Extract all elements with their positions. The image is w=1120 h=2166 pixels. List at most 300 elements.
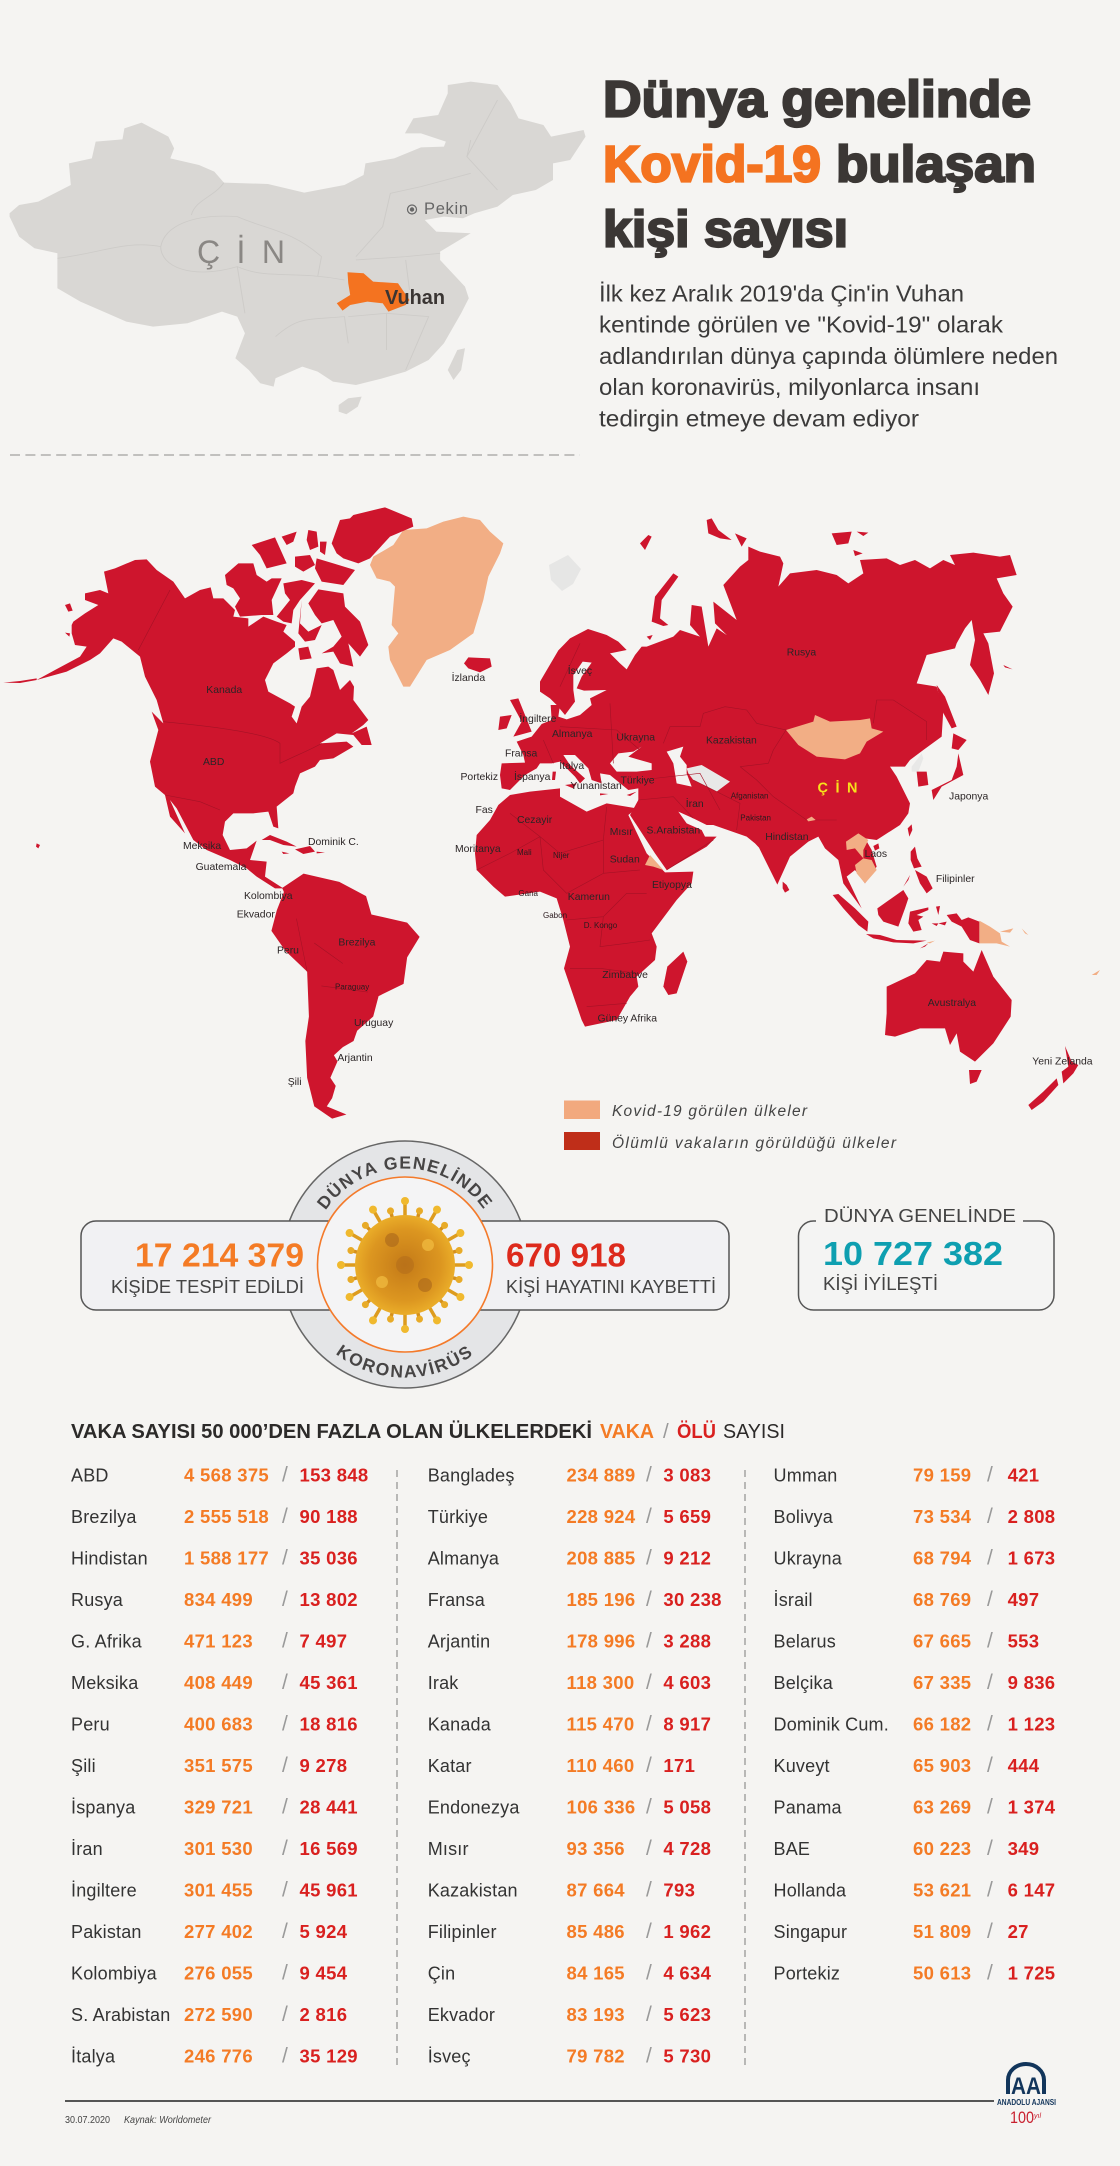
table heading: ÖLÜ bbox=[677, 1420, 716, 1443]
logo: Anadolu Ajansı: AA bbox=[1011, 2073, 1041, 2100]
North Korea bbox=[912, 753, 923, 772]
row: Peru: 400 683 bbox=[184, 1714, 253, 1735]
country labels: Fas bbox=[476, 805, 493, 816]
row: S. Arabistan: S. Arabistan bbox=[71, 2005, 170, 2025]
row: Çin: Çin bbox=[428, 1964, 455, 1984]
row: Singapur: 27 bbox=[1008, 1921, 1029, 1942]
country labels: Uruguay bbox=[354, 1018, 394, 1029]
country labels: İzlanda bbox=[452, 671, 485, 684]
country labels: ABD bbox=[203, 757, 224, 768]
South America bbox=[271, 874, 420, 1119]
logo: Anadolu Ajansı: ANADOLU AJANSI bbox=[997, 2098, 1056, 2107]
country labels: Laos bbox=[865, 849, 887, 860]
row: S. Arabistan bbox=[71, 2003, 347, 2026]
logo: Anadolu Ajansı: 100 bbox=[1010, 2108, 1034, 2127]
intro paragraph: adlandırılan dünya çapında ölümlere neden bbox=[599, 343, 1058, 369]
row: Dominik Cum.: / bbox=[987, 1713, 993, 1736]
row: Kuveyt: 444 bbox=[1008, 1755, 1040, 1776]
row: İngiltere: İngiltere bbox=[71, 1881, 137, 1901]
map legend bbox=[564, 1100, 897, 1152]
row: İspanya: İspanya bbox=[71, 1798, 136, 1818]
row: Belarus bbox=[774, 1630, 1039, 1653]
row: Çin: 84 165 bbox=[566, 1963, 625, 1984]
row: Filipinler: Filipinler bbox=[428, 1922, 497, 1942]
stats box bbox=[81, 1221, 729, 1310]
Mongolia bbox=[786, 715, 883, 759]
row: Mısır: 4 728 bbox=[663, 1838, 711, 1859]
Arctic islands and Caribbean bbox=[3, 507, 492, 854]
row: İsrail: 68 769 bbox=[913, 1589, 971, 1610]
row: Katar: 171 bbox=[663, 1755, 695, 1776]
title: Dünya genelinde bbox=[603, 71, 1031, 128]
row: Umman: 421 bbox=[1008, 1465, 1039, 1486]
row: Hindistan: 1 588 177 bbox=[184, 1548, 269, 1569]
row: Meksika: Meksika bbox=[71, 1673, 139, 1693]
row: İsrail bbox=[774, 1588, 1039, 1611]
row: Peru: Peru bbox=[71, 1715, 110, 1735]
row: ABD: 153 848 bbox=[300, 1465, 368, 1486]
label: Çin: Ç İ N bbox=[197, 234, 285, 270]
row: Irak bbox=[428, 1671, 711, 1694]
country labels: Zimbabve bbox=[602, 970, 648, 981]
row: Kanada: 115 470 bbox=[566, 1714, 634, 1735]
row: Hollanda: / bbox=[987, 1879, 993, 1902]
row: Kolombiya bbox=[71, 1962, 348, 1985]
intro paragraph: kentinde görülen ve "Kovid-19" olarak bbox=[599, 312, 1004, 338]
row: Kazakistan: 793 bbox=[663, 1880, 695, 1901]
country labels: Avustralya bbox=[928, 998, 976, 1009]
country labels: D. Kongo bbox=[584, 921, 618, 930]
table column 3 bbox=[774, 1464, 1056, 1985]
table column 2 bbox=[428, 1464, 722, 2068]
row: İsveç bbox=[428, 2045, 711, 2068]
row: İtalya bbox=[71, 2045, 358, 2068]
table heading: VAKA SAYISI 50 000’DEN FAZLA OLAN ÜLKELERDEKİ bbox=[71, 1420, 592, 1443]
stat: cases: 17 214 379 bbox=[135, 1237, 304, 1274]
Africa bbox=[475, 788, 693, 1027]
Europe, Asia and Africa bbox=[475, 547, 1017, 1027]
row: Fransa: 30 238 bbox=[663, 1589, 722, 1610]
row: İspanya: 28 441 bbox=[300, 1797, 358, 1818]
country labels: İtalya bbox=[559, 759, 584, 772]
row: Katar: Katar bbox=[428, 1756, 472, 1776]
row: Kazakistan: 87 664 bbox=[566, 1880, 625, 1901]
row: ABD bbox=[71, 1464, 368, 1487]
row: G. Afrika bbox=[71, 1630, 347, 1653]
row: Kazakistan: Kazakistan bbox=[428, 1881, 518, 1901]
row: Katar: 110 460 bbox=[566, 1755, 634, 1776]
row: Çin: / bbox=[646, 1962, 652, 1985]
row: Çin: 4 634 bbox=[663, 1963, 712, 1984]
row: Pakistan: Pakistan bbox=[71, 1922, 142, 1942]
intro paragraph bbox=[599, 281, 1058, 432]
row: Umman: 79 159 bbox=[913, 1465, 971, 1486]
row: Endonezya: 106 336 bbox=[566, 1797, 635, 1818]
row: BAE: BAE bbox=[774, 1839, 810, 1859]
row: Peru: / bbox=[282, 1713, 288, 1736]
row: Kuveyt: 65 903 bbox=[913, 1755, 971, 1776]
Hubei province bbox=[337, 272, 409, 312]
country labels: Sudan bbox=[610, 854, 640, 866]
row: İsveç: 5 730 bbox=[663, 2046, 711, 2067]
country labels: Cezayir bbox=[517, 815, 553, 826]
row: BAE: / bbox=[987, 1837, 993, 1860]
row: İspanya bbox=[71, 1796, 358, 1819]
row: İran: 301 530 bbox=[184, 1838, 253, 1859]
row: Rusya: / bbox=[282, 1588, 288, 1611]
ring text bottom: KORONAVİRÜS bbox=[336, 1344, 472, 1378]
row: Hollanda: 53 621 bbox=[913, 1880, 971, 1901]
North America, Greenland, Iceland bbox=[3, 507, 503, 888]
row: Belarus: 553 bbox=[1008, 1631, 1039, 1652]
row: Türkiye: 5 659 bbox=[663, 1506, 711, 1527]
stat: deaths bbox=[506, 1237, 716, 1297]
country labels: Moritanya bbox=[455, 844, 501, 855]
stat: deaths: 670 918 bbox=[506, 1237, 626, 1274]
row: İsveç: İsveç bbox=[428, 2047, 471, 2067]
country labels: Kazakistan bbox=[706, 736, 757, 747]
row: Kuveyt bbox=[774, 1754, 1040, 1777]
country labels: İran bbox=[686, 797, 704, 810]
Eurasia bbox=[500, 547, 1017, 908]
country labels: Rusya bbox=[787, 648, 816, 659]
map: China with Wuhan bbox=[10, 82, 586, 414]
Seas bbox=[610, 747, 692, 787]
world map bbox=[3, 507, 1100, 1119]
row: G. Afrika: 7 497 bbox=[300, 1631, 347, 1652]
logo: Anadolu Ajansı: yıl bbox=[1033, 2113, 1041, 2120]
row: İsrail: / bbox=[987, 1588, 993, 1611]
row: Katar: / bbox=[646, 1754, 652, 1777]
row: Irak: / bbox=[646, 1671, 652, 1694]
map legend: Kovid-19 görülen ülkeler bbox=[612, 1103, 808, 1120]
row: İtalya: 246 776 bbox=[184, 2046, 253, 2067]
country labels: Nijer bbox=[553, 851, 570, 860]
China landmass bbox=[10, 82, 586, 387]
row: Filipinler bbox=[428, 1920, 711, 1943]
country labels: Etiyopya bbox=[652, 880, 692, 891]
row: Hollanda: Hollanda bbox=[774, 1881, 847, 1901]
row: Kanada: Kanada bbox=[428, 1715, 492, 1735]
country labels: Ç İ N bbox=[818, 780, 858, 797]
row: ABD: 4 568 375 bbox=[184, 1465, 269, 1486]
country labels: Almanya bbox=[552, 729, 593, 740]
icon: coronavirus bbox=[337, 1197, 473, 1333]
row: Hollanda: 6 147 bbox=[1008, 1880, 1055, 1901]
row: Kuveyt: / bbox=[987, 1754, 993, 1777]
country labels: Mısır bbox=[610, 827, 633, 838]
row: Brezilya: / bbox=[282, 1505, 288, 1528]
row: Kolombiya: 276 055 bbox=[184, 1963, 253, 1984]
row: Bolivya: 2 808 bbox=[1008, 1506, 1055, 1527]
badge ring bbox=[282, 1141, 528, 1388]
row: Panama: Panama bbox=[774, 1798, 843, 1818]
row: Mısır bbox=[428, 1837, 711, 1860]
row: Türkiye: Türkiye bbox=[428, 1507, 488, 1527]
row: Brezilya: 90 188 bbox=[300, 1506, 358, 1527]
row: Bolivya: / bbox=[987, 1505, 993, 1528]
footer: date and source: 30.07.2020 bbox=[65, 2115, 110, 2126]
row: ABD: ABD bbox=[71, 1466, 109, 1486]
row: Portekiz bbox=[774, 1962, 1055, 1985]
row: Almanya: 9 212 bbox=[663, 1548, 711, 1569]
row: Brezilya bbox=[71, 1505, 358, 1528]
row: Kolombiya: Kolombiya bbox=[71, 1964, 158, 1984]
row: Singapur: 51 809 bbox=[913, 1921, 971, 1942]
row: Türkiye: 228 924 bbox=[566, 1506, 636, 1527]
country labels: Guatemala bbox=[196, 862, 247, 873]
row: Ukrayna: 1 673 bbox=[1008, 1548, 1055, 1569]
row: Rusya: 13 802 bbox=[300, 1589, 358, 1610]
row: Rusya bbox=[71, 1588, 358, 1611]
stat panel: recovered: 10 727 382 bbox=[823, 1235, 1003, 1272]
stat panel: recovered: DÜNYA GENELİNDE bbox=[824, 1205, 1016, 1226]
country labels: Ukrayna bbox=[616, 733, 655, 744]
row: İspanya: / bbox=[282, 1796, 288, 1819]
row: Belarus: / bbox=[987, 1630, 993, 1653]
title: kişi sayısı bbox=[603, 201, 848, 258]
row: Arjantin: Arjantin bbox=[428, 1632, 490, 1652]
logo: Anadolu Ajansı bbox=[997, 2064, 1056, 2127]
row: Şili: Şili bbox=[71, 1756, 96, 1776]
Svalbard bbox=[549, 555, 581, 591]
row: BAE bbox=[774, 1837, 1039, 1860]
table heading: SAYISI bbox=[723, 1420, 785, 1443]
row: Hindistan bbox=[71, 1547, 358, 1570]
row: Mısır: / bbox=[646, 1837, 652, 1860]
country labels: Hindistan bbox=[765, 832, 809, 843]
row: Panama bbox=[774, 1796, 1056, 1819]
intro paragraph: İlk kez Aralık 2019'da Çin'in Vuhan bbox=[599, 281, 964, 307]
row: Ekvador: Ekvador bbox=[428, 2005, 495, 2025]
row: Arjantin: 178 996 bbox=[566, 1631, 635, 1652]
row: Endonezya: Endonezya bbox=[428, 1798, 520, 1818]
row: Fransa: 185 196 bbox=[566, 1589, 635, 1610]
row: Bangladeş: 3 083 bbox=[663, 1465, 711, 1486]
peach countries bbox=[807, 817, 1100, 975]
row: İsrail: İsrail bbox=[774, 1590, 813, 1610]
row: Şili: / bbox=[282, 1754, 288, 1777]
row: İran: 16 569 bbox=[300, 1838, 358, 1859]
row: Kazakistan bbox=[428, 1879, 695, 1902]
row: Filipinler: 85 486 bbox=[566, 1921, 625, 1942]
row: Irak: Irak bbox=[428, 1673, 459, 1693]
row: Meksika: 45 361 bbox=[300, 1672, 358, 1693]
row: Dominik Cum.: 66 182 bbox=[913, 1714, 971, 1735]
row: Şili bbox=[71, 1754, 347, 1777]
row: Almanya: Almanya bbox=[428, 1549, 500, 1569]
row: Almanya bbox=[428, 1547, 711, 1570]
row: Endonezya: / bbox=[646, 1796, 652, 1819]
country labels: Fransa bbox=[505, 748, 538, 759]
row: Şili: 9 278 bbox=[300, 1755, 347, 1776]
map legend: Ölümlü vakaların görüldüğü ülkeler bbox=[612, 1134, 897, 1152]
row: Portekiz: Portekiz bbox=[774, 1964, 840, 1984]
row: Türkiye: / bbox=[646, 1505, 652, 1528]
row: Singapur: Singapur bbox=[774, 1922, 847, 1942]
row: Rusya: Rusya bbox=[71, 1590, 124, 1610]
row: Meksika bbox=[71, 1671, 358, 1694]
country labels: Güney Afrika bbox=[598, 1014, 657, 1025]
country labels: Afganistan bbox=[731, 791, 769, 800]
row: Şili: 351 575 bbox=[184, 1755, 253, 1776]
country labels: Filipinler bbox=[936, 874, 975, 885]
row: Belçika: 67 335 bbox=[913, 1672, 971, 1693]
row: Pakistan: 5 924 bbox=[300, 1921, 348, 1942]
row: Kuveyt: Kuveyt bbox=[774, 1756, 830, 1776]
country labels: Japonya bbox=[949, 792, 989, 803]
country labels: Portekiz bbox=[460, 772, 498, 783]
footer: date and source: Kaynak: Worldometer bbox=[124, 2115, 212, 2126]
Asian islands bbox=[640, 518, 1013, 800]
row: S. Arabistan: / bbox=[282, 2003, 288, 2026]
country labels: Arjantin bbox=[337, 1053, 373, 1064]
intro paragraph: tedirgin etmeye devam ediyor bbox=[599, 406, 919, 432]
country labels: Paraguay bbox=[335, 982, 369, 991]
row: İsrail: 497 bbox=[1008, 1589, 1039, 1610]
table heading: VAKA bbox=[600, 1420, 654, 1443]
table column 1 bbox=[71, 1464, 368, 2068]
country labels: Dominik C. bbox=[308, 837, 359, 848]
row: İtalya: 35 129 bbox=[300, 2046, 358, 2067]
red islands bbox=[783, 824, 1078, 1110]
country labels: Gana bbox=[518, 889, 539, 898]
row: Endonezya: 5 058 bbox=[663, 1797, 711, 1818]
row: Almanya: 208 885 bbox=[566, 1548, 635, 1569]
stat: cases bbox=[111, 1237, 304, 1297]
row: Hindistan: / bbox=[282, 1547, 288, 1570]
row: Belarus: Belarus bbox=[774, 1632, 836, 1652]
country labels: Mali bbox=[517, 848, 532, 857]
row: Mısır: Mısır bbox=[428, 1839, 469, 1859]
country labels: Peru bbox=[277, 946, 299, 956]
row: Ekvador: / bbox=[646, 2003, 652, 2026]
Eritrea bbox=[645, 855, 663, 870]
row: Umman: / bbox=[987, 1464, 993, 1487]
row: Bolivya bbox=[774, 1505, 1055, 1528]
Southeast Asia and Oceania bbox=[783, 817, 1100, 1110]
row: Arjantin bbox=[428, 1630, 711, 1653]
country labels: Kolombiya bbox=[244, 891, 293, 902]
row: Panama: 1 374 bbox=[1008, 1797, 1056, 1818]
Taiwan bbox=[448, 348, 465, 380]
row: Belçika bbox=[774, 1671, 1055, 1694]
row: İran bbox=[71, 1837, 358, 1860]
country labels: Yunanistan bbox=[570, 781, 622, 792]
row: Bangladeş: Bangladeş bbox=[428, 1466, 515, 1486]
row: Endonezya bbox=[428, 1796, 711, 1819]
stat: deaths: KİŞİ HAYATINI KAYBETTİ bbox=[506, 1277, 716, 1297]
row: Panama: / bbox=[987, 1796, 993, 1819]
title bbox=[603, 71, 1036, 258]
country labels: İsveç bbox=[568, 664, 592, 677]
row: S. Arabistan: 272 590 bbox=[184, 2004, 253, 2025]
row: Hindistan: 35 036 bbox=[300, 1548, 358, 1569]
row: İngiltere: / bbox=[282, 1879, 288, 1902]
row: Fransa: Fransa bbox=[428, 1590, 486, 1610]
country labels: Yeni Zelanda bbox=[1032, 1057, 1093, 1068]
row: Türkiye bbox=[428, 1505, 711, 1528]
country labels: Şili bbox=[288, 1077, 302, 1088]
row: Bolivya: 73 534 bbox=[913, 1506, 972, 1527]
row: Portekiz: / bbox=[987, 1962, 993, 1985]
Turkmenistan grey bbox=[687, 765, 730, 792]
row: Fransa: / bbox=[646, 1588, 652, 1611]
row: İngiltere bbox=[71, 1879, 358, 1902]
row: Meksika: / bbox=[282, 1671, 288, 1694]
title: bulaşan bbox=[836, 136, 1036, 193]
country labels: Türkiye bbox=[620, 776, 655, 787]
ring text top: DÜNYA GENELİNDE bbox=[316, 1156, 492, 1210]
row: Ukrayna: 68 794 bbox=[913, 1548, 972, 1569]
row: Bolivya: Bolivya bbox=[774, 1507, 834, 1527]
country labels: Meksika bbox=[183, 841, 221, 852]
row: Kolombiya: 9 454 bbox=[300, 1963, 348, 1984]
row: Belçika: Belçika bbox=[774, 1673, 834, 1693]
row: Belçika: / bbox=[987, 1671, 993, 1694]
row: Kanada: 8 917 bbox=[663, 1714, 711, 1735]
row: G. Afrika: / bbox=[282, 1630, 288, 1653]
row: Ekvador: 83 193 bbox=[566, 2004, 625, 2025]
country labels bbox=[183, 648, 1093, 1088]
row: Bangladeş bbox=[428, 1464, 711, 1487]
stat panel: recovered: KİŞİ İYİLEŞTİ bbox=[823, 1274, 938, 1294]
row: G. Afrika: G. Afrika bbox=[71, 1632, 143, 1652]
row: Hindistan: Hindistan bbox=[71, 1549, 148, 1569]
row: Portekiz: 1 725 bbox=[1008, 1963, 1055, 1984]
row: Portekiz: 50 613 bbox=[913, 1963, 971, 1984]
row: Belçika: 9 836 bbox=[1008, 1672, 1055, 1693]
country labels: İspanya bbox=[514, 770, 551, 783]
row: İran: / bbox=[282, 1837, 288, 1860]
row: Meksika: 408 449 bbox=[184, 1672, 253, 1693]
row: Ekvador: 5 623 bbox=[663, 2004, 711, 2025]
inner circle bbox=[318, 1177, 492, 1352]
row: Ekvador bbox=[428, 2003, 711, 2026]
row: ABD: / bbox=[282, 1464, 288, 1487]
row: Dominik Cum. bbox=[774, 1713, 1055, 1736]
country labels: Kanada bbox=[206, 685, 242, 696]
row: İsveç: / bbox=[646, 2045, 652, 2068]
row: Irak: 4 603 bbox=[663, 1672, 711, 1693]
row: G. Afrika: 471 123 bbox=[184, 1631, 253, 1652]
row: İtalya: İtalya bbox=[71, 2047, 116, 2067]
footer: date and source bbox=[65, 2115, 212, 2126]
row: İngiltere: 45 961 bbox=[300, 1880, 358, 1901]
country labels: S.Arabistan bbox=[646, 826, 700, 836]
row: Kanada: / bbox=[646, 1713, 652, 1736]
row: Dominik Cum.: Dominik Cum. bbox=[774, 1715, 889, 1735]
row: Mısır: 93 356 bbox=[566, 1838, 625, 1859]
Europe and Africa islands bbox=[498, 698, 687, 995]
row: Filipinler: / bbox=[646, 1920, 652, 1943]
country labels: Brezilya bbox=[338, 937, 376, 948]
country labels: Kamerun bbox=[568, 892, 610, 903]
row: Singapur: / bbox=[987, 1920, 993, 1943]
row: Umman bbox=[774, 1464, 1039, 1487]
row: Dominik Cum.: 1 123 bbox=[1008, 1714, 1055, 1735]
row: Almanya: / bbox=[646, 1547, 652, 1570]
Hainan bbox=[339, 397, 362, 414]
stat panel: recovered bbox=[798, 1205, 1054, 1310]
row: Pakistan: / bbox=[282, 1920, 288, 1943]
row: Singapur bbox=[774, 1920, 1029, 1943]
row: Rusya: 834 499 bbox=[184, 1589, 253, 1610]
row: Kolombiya: / bbox=[282, 1962, 288, 1985]
row: İngiltere: 301 455 bbox=[184, 1880, 253, 1901]
table heading: / bbox=[663, 1420, 669, 1443]
row: Arjantin: / bbox=[646, 1630, 652, 1653]
